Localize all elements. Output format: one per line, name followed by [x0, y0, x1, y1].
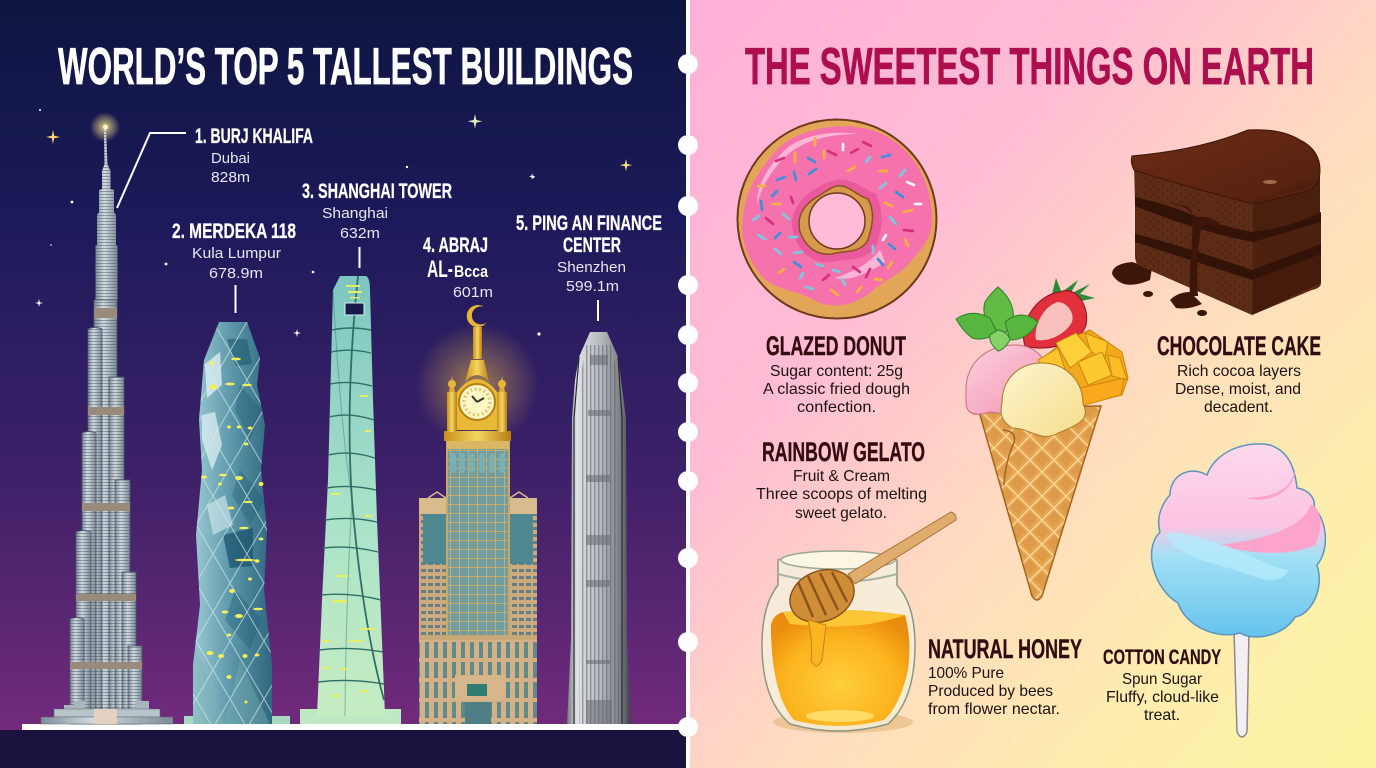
label: Shanghai Tower: 3. SHANGHAI TOWER	[302, 180, 452, 203]
vanilla scoop	[1001, 363, 1085, 436]
text: chocolate cake: Rich cocoa layers	[1177, 363, 1301, 380]
text: cotton candy	[1103, 646, 1221, 724]
label: Abraj Al-Bait: 4. ABRAJ	[423, 234, 488, 257]
text: chocolate cake: decadent.	[1204, 399, 1273, 416]
text: glazed donut	[763, 331, 910, 416]
text: natural honey: Produced by bees	[928, 683, 1053, 700]
building: Abraj Al-Bait clock tower	[415, 305, 539, 724]
text: glazed donut: GLAZED DONUT	[766, 331, 906, 361]
mint	[956, 287, 1038, 351]
label: Shanghai Tower: Shanghai	[322, 205, 388, 222]
crescent	[467, 305, 487, 327]
strawberry	[1023, 278, 1095, 348]
icon: ice cream cone	[956, 278, 1128, 600]
icon: cotton candy	[1152, 444, 1325, 737]
building: Merdeka 118	[184, 320, 290, 725]
label: Shanghai Tower: 632m	[340, 225, 380, 242]
text: natural honey: NATURAL HONEY	[928, 634, 1082, 664]
clock tower crown	[444, 305, 511, 441]
label: Merdeka 118	[172, 220, 296, 313]
text: cotton candy: COTTON CANDY	[1103, 646, 1221, 669]
icon: honey jar	[762, 512, 956, 733]
label: Ping An Finance Center: 5. PING AN FINANCE	[516, 212, 662, 235]
label: Ping An Finance Center: CENTER	[563, 234, 621, 257]
label: Burj Khalifa: 1. BURJ KHALIFA	[195, 125, 313, 148]
text: natural honey: from flower nectar.	[928, 701, 1060, 718]
panel: tallest buildings	[0, 0, 686, 768]
text: natural honey	[928, 634, 1082, 718]
building: Burj Khalifa	[41, 112, 173, 724]
text: cotton candy: Spun Sugar	[1122, 671, 1203, 688]
label: Burj Khalifa	[117, 125, 313, 208]
building: Shanghai Tower	[300, 276, 401, 724]
label: Abraj Al-Bait: Bcca	[454, 262, 488, 281]
text: glazed donut: A classic fried dough	[763, 381, 910, 398]
ground line	[22, 724, 680, 730]
label: Abraj Al-Bait: 601m	[453, 284, 493, 301]
label: Abraj Al-Bait: AL-	[427, 256, 453, 283]
cone	[978, 406, 1101, 600]
text: glazed donut: confection.	[797, 399, 876, 416]
label: Merdeka 118: 2. MERDEKA 118	[172, 220, 296, 243]
label: Ping An Finance Center: 599.1m	[566, 278, 619, 295]
label: Abraj Al-Bait	[423, 234, 493, 301]
text: chocolate cake: Dense, moist, and	[1175, 381, 1301, 398]
text: rainbow gelato: Fruit & Cream	[793, 468, 890, 485]
text: rainbow gelato: Three scoops of melting	[756, 486, 927, 503]
label: Burj Khalifa: Dubai	[211, 150, 250, 167]
text: rainbow gelato: sweet gelato.	[795, 505, 887, 522]
label: Ping An Finance Center	[516, 212, 662, 321]
label: Burj Khalifa: 828m	[211, 169, 250, 186]
text: cotton candy: treat.	[1144, 707, 1180, 724]
mango	[1038, 330, 1128, 407]
icon: chocolate cake	[1112, 130, 1321, 316]
text: rainbow gelato	[756, 437, 927, 522]
building: Ping An Finance Center	[567, 332, 631, 724]
icon: glazed donut	[738, 120, 936, 318]
dipper	[782, 512, 956, 666]
label: Merdeka 118: Kula Lumpur	[192, 245, 281, 262]
text: glazed donut: Sugar content: 25g	[770, 363, 903, 380]
label: Ping An Finance Center: Shenzhen	[557, 259, 626, 276]
text: chocolate cake	[1157, 331, 1321, 416]
label: Shanghai Tower	[302, 180, 452, 268]
label: Merdeka 118: 678.9m	[209, 265, 263, 282]
notched divider	[678, 0, 698, 768]
panel: sweetest things	[690, 0, 1376, 768]
text: rainbow gelato: RAINBOW GELATO	[762, 437, 925, 467]
pink scoop	[966, 345, 1052, 418]
title: WORLD’S TOP 5 TALLEST BUILDINGS	[58, 38, 633, 96]
text: cotton candy: Fluffy, cloud-like	[1106, 689, 1219, 706]
text: natural honey: 100% Pure	[928, 665, 1004, 682]
stars	[35, 109, 632, 337]
